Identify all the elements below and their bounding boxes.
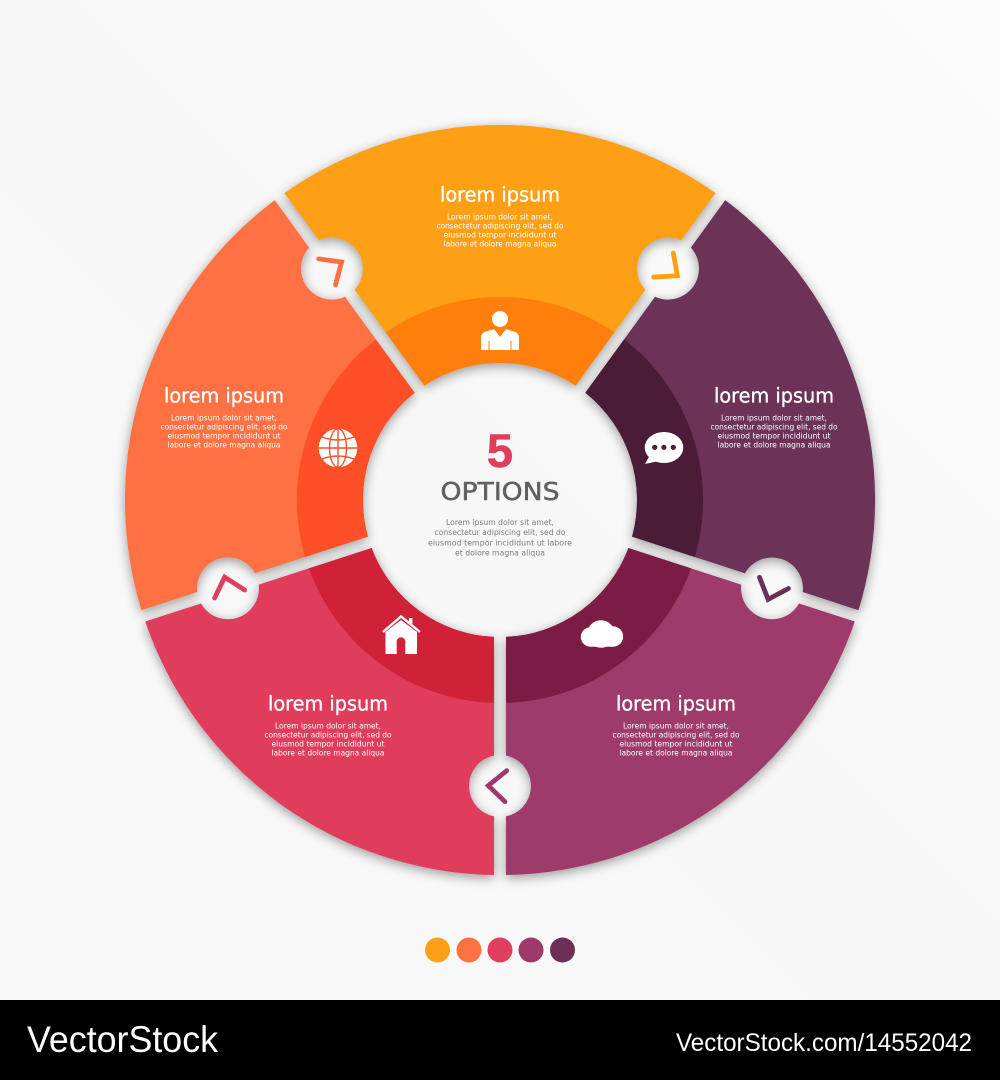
text block: right: labore et dolore magna aliqua [718,440,831,449]
wedge: left [77,179,458,670]
inner ring: top [386,297,614,386]
text block: left: labore et dolore magna aliqua [168,440,281,449]
wedge: right [542,179,923,670]
wedge: top [284,125,716,386]
text block: left [160,413,288,449]
heading: right: lorem ipsum [714,384,834,408]
text block: center: et dolore magna aliqua [455,548,545,558]
text block: bottom left: labore et dolore magna aliqua [272,748,385,757]
panel: bottom right option [393,466,895,930]
heading: bottom left: lorem ipsum [268,692,388,716]
text block: right [710,413,838,449]
text block: top: Lorem ipsum dolor sit amet, [447,212,553,221]
text block: top: eiusmod tempor incididunt ut [444,230,556,239]
arrow: lower left [209,573,245,600]
arrow: bottom [488,771,507,802]
text block: bottom right: eiusmod tempor incididunt ut [620,739,732,748]
text block: top: labore et dolore magna aliqua [444,239,557,248]
text block: bottom right: consectetur adipiscing elit, sed do [612,730,740,739]
text block: bottom right: Lorem ipsum dolor sit amet, [623,721,729,730]
text block: left: consectetur adipiscing elit, sed do [160,422,288,431]
wedge: bottom right [393,466,895,930]
arrow: upper left [317,249,350,285]
number 5: 5 [487,424,513,477]
arrow: upper right [654,252,687,288]
heading: left: lorem ipsum [164,384,284,408]
text block: bottom right: labore et dolore magna aliqua [620,748,733,757]
icon: house [383,616,420,654]
inner ring: left [272,328,427,573]
icon: speech bubble [645,432,683,464]
inner ring: right [573,328,728,573]
text block: center: consectetur adipiscing elit, sed do [434,528,566,537]
text block: center: eiusmod tempor incididunt ut labore [428,538,572,548]
text block: bottom left: Lorem ipsum dolor sit amet, [275,721,381,730]
icon: person [481,311,519,350]
text block: top: consectetur adipiscing elit, sed do [436,221,564,230]
center label [428,424,572,558]
panel: bottom left option [105,466,607,930]
panel: top option [284,125,716,386]
heading: top: lorem ipsum [440,182,560,206]
text block: right: eiusmod tempor incididunt ut [718,431,830,440]
arrows: chevrons in the notches [209,249,789,802]
icon: cloud [581,620,623,648]
panel: left option [77,179,458,670]
text block: bottom left: consectetur adipiscing elit, sed do [264,730,392,739]
text block: right: Lorem ipsum dolor sit amet, [721,413,827,422]
text block: right: consectetur adipiscing elit, sed do [710,422,838,431]
arrow: lower right [754,577,789,604]
footer brand: VectorStock [27,1019,218,1060]
footer url: VectorStock.com/14552042 [676,1029,972,1057]
heading: bottom right: lorem ipsum [616,692,736,716]
text block: left: Lorem ipsum dolor sit amet, [171,413,277,422]
text block: bottom left [264,721,392,757]
text block: top [436,212,564,248]
footer bar [0,1000,1000,1080]
icon: globe [319,429,357,467]
inner ring: bottom right [475,525,712,731]
inner ring: bottom left [288,525,525,731]
text block: center [428,518,572,558]
heading: options: OPTIONS [440,477,560,506]
circular chart [77,125,923,930]
panel: right option [542,179,923,670]
text block: bottom left: eiusmod tempor incididunt ut [272,739,384,748]
legend dots [425,938,575,962]
text block: left: eiusmod tempor incididunt ut [168,431,280,440]
text block: bottom right [612,721,740,757]
wedge: bottom left [105,466,607,930]
text block: center: Lorem ipsum dolor sit amet, [446,518,554,527]
